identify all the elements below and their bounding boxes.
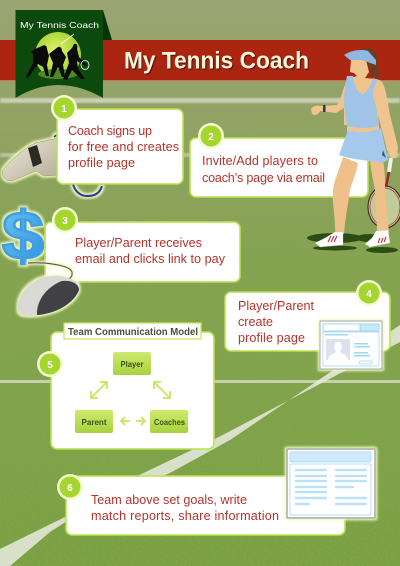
racket bbox=[368, 158, 400, 228]
node: Coaches bbox=[150, 410, 188, 433]
step 2 text: Invite/Add players to bbox=[202, 154, 318, 168]
logo ball bbox=[35, 32, 81, 78]
skin bbox=[311, 60, 398, 158]
panel: step 1 bbox=[51, 95, 183, 184]
panel: step 6 bbox=[57, 474, 345, 535]
panel: step 3 bbox=[45, 207, 240, 282]
logo ribbon bbox=[16, 10, 112, 98]
icon: computer mouse bbox=[18, 263, 79, 316]
icon: document page bbox=[287, 449, 375, 518]
model title bbox=[64, 323, 201, 339]
panel: step 5 team communication model bbox=[37, 323, 214, 449]
panel: step 4 bbox=[225, 280, 390, 351]
step 6 text: match reports, share information bbox=[91, 509, 279, 523]
step 2 text: coach’s page via email bbox=[202, 171, 325, 185]
step 2 badge: 2 bbox=[208, 132, 214, 143]
tennis player figure bbox=[307, 48, 400, 253]
heading: My Tennis Coach bbox=[124, 48, 309, 74]
logo text: My Tennis Coach bbox=[20, 20, 99, 30]
step 2 badge bbox=[198, 123, 224, 149]
midriff bbox=[347, 124, 379, 133]
top bbox=[344, 76, 379, 128]
icon: profile card bbox=[320, 321, 382, 369]
step 5 badge: 5 bbox=[47, 360, 53, 371]
step 6 text: Team above set goals, write bbox=[91, 493, 247, 507]
step 4 text: profile page bbox=[238, 331, 305, 345]
model title: Team Communication Model bbox=[68, 326, 198, 338]
step 1 text: profile page bbox=[68, 156, 135, 170]
step 4 text: Player/Parent bbox=[238, 299, 314, 313]
step 1 badge: 1 bbox=[61, 104, 67, 115]
skirt bbox=[339, 128, 388, 163]
node: Parent bbox=[75, 410, 113, 433]
icon: whistle bbox=[2, 134, 60, 181]
step 4 badge: 4 bbox=[366, 289, 372, 300]
step 6 badge bbox=[57, 474, 83, 500]
title banner bbox=[0, 40, 400, 81]
node: Player: Player bbox=[120, 359, 144, 369]
node: Coaches: Coaches bbox=[154, 417, 185, 427]
wristband bbox=[323, 105, 326, 112]
ground shadows bbox=[307, 233, 398, 253]
step 3 text: email and clicks link to pay bbox=[75, 252, 226, 266]
logo racket bbox=[61, 34, 89, 70]
step 1 text: Coach signs up bbox=[68, 124, 152, 138]
arrow: player to coaches bbox=[154, 382, 170, 398]
visor bbox=[344, 50, 376, 65]
panel: step 2 bbox=[190, 123, 368, 197]
node: Player bbox=[113, 352, 151, 375]
arrow: player to parent bbox=[91, 382, 107, 398]
step 1 text: for free and creates bbox=[68, 140, 179, 154]
step 4 badge bbox=[356, 280, 382, 306]
icon: dollar sign: $ bbox=[2, 198, 44, 274]
legs bbox=[333, 157, 389, 234]
step 4 text: create bbox=[238, 315, 273, 329]
arrow: parent to coaches bbox=[121, 417, 145, 425]
step 3 text: Player/Parent receives bbox=[75, 236, 202, 250]
shoe stripes bbox=[328, 236, 386, 243]
step 3 badge bbox=[52, 207, 78, 233]
shoes bbox=[315, 230, 390, 247]
logo player silhouettes bbox=[26, 44, 87, 80]
step 5 badge bbox=[37, 351, 63, 377]
node: Parent: Parent bbox=[82, 417, 107, 427]
icon: lanyard clip bbox=[73, 184, 102, 196]
hair bbox=[362, 48, 379, 79]
step 6 badge: 6 bbox=[67, 483, 73, 494]
step 3 badge: 3 bbox=[62, 216, 68, 227]
